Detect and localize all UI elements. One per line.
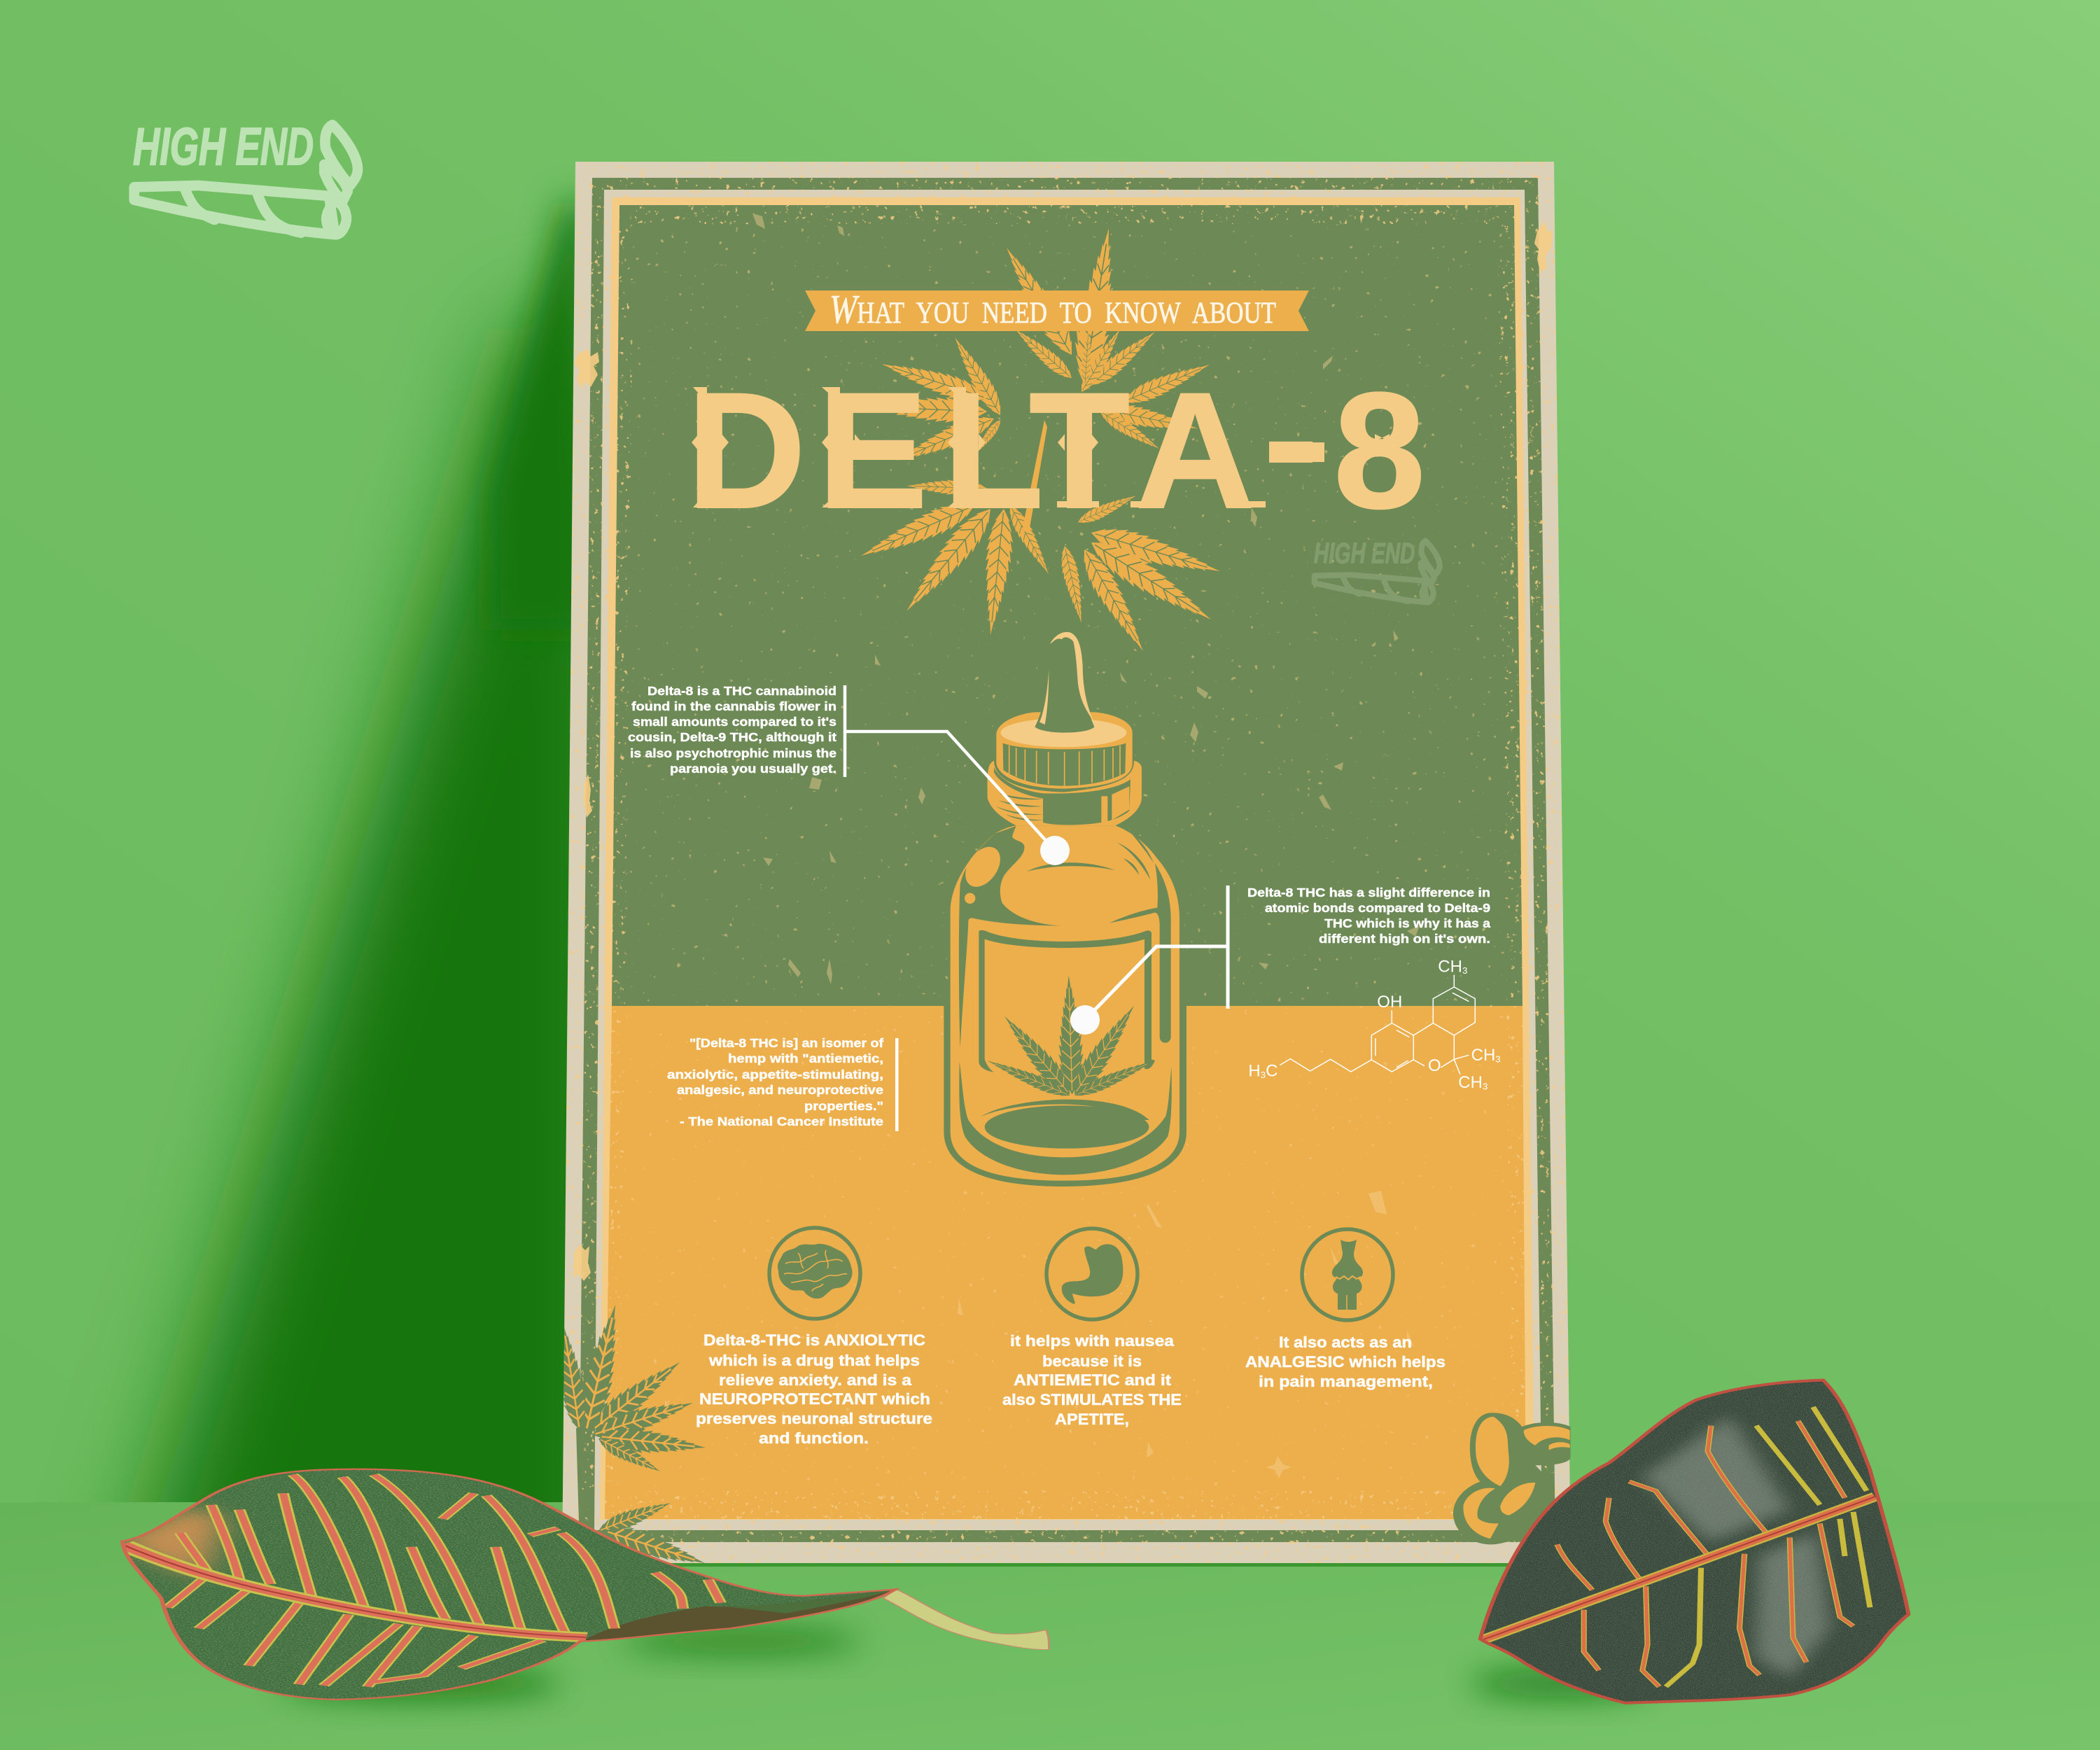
logo top left: HIGH END [133,117,314,176]
right shoulder streaks [1129,831,1154,863]
callout: atomic bonds: Delta-8 THC has a slight difference in [1247,886,1490,899]
watermark logo [1314,536,1440,602]
poster outer frame [562,162,1571,1563]
THC molecule diagram [1248,957,1501,1092]
dropper bulb [1035,636,1094,733]
leaf midrib [1482,1497,1875,1640]
THC molecule diagram: O [1428,1056,1441,1075]
left leaf shadow [280,1629,861,1699]
heading ribbon [805,286,1309,332]
orange lower panel [605,1006,1526,1519]
callout: national cancer institute quote [667,1036,883,1128]
callout: what delta-8 is [628,684,836,776]
column text: antiemetic: it helps with nausea [1010,1332,1175,1350]
green upper panel [612,205,1522,1006]
dropper bottle [944,632,1186,1186]
watermark logo: HIGH END [1314,536,1415,569]
leaf on label [984,975,1158,1102]
leaf midrib [122,1545,587,1637]
column text: anxiolytic: which is a drug that helps [708,1352,920,1369]
callout: atomic bonds: atomic bonds compared to Delta-9 [1265,901,1490,915]
right side shading and highlight bar [1110,863,1171,1043]
THC molecule diagram: C [1266,1061,1278,1080]
callout: national cancer institute quote: hemp with "antiemetic, [728,1051,883,1065]
callout: atomic bonds: different high on it's own. [1319,932,1490,946]
poster cast shadow [91,185,575,1502]
callout: what delta-8 is: is also psychotrophic minus the [630,746,836,760]
collar green band [994,768,1130,825]
callout: national cancer institute quote: "[Delta-8 THC is] an isomer of [690,1036,883,1050]
icon: stomach [1046,1228,1138,1320]
THC molecule diagram: OH [1377,993,1402,1011]
THC molecule diagram: 3 [1495,1054,1501,1065]
column text: antiemetic: APETITE, [1055,1410,1129,1428]
THC molecule diagram: CH [1458,1073,1483,1092]
left shoulder shading [959,826,1062,1048]
upper cap [996,712,1133,789]
paint chips on orange panel [665,1191,1414,1478]
callout line: top [845,685,1070,865]
collar highlight bars [1101,786,1129,822]
poster contact shadow [567,1560,1568,1567]
column text: antiemetic: ANTIEMETIC and it [1014,1371,1172,1389]
leaf veins [167,1475,721,1687]
column text: analgesic: ANALGESIC which helps [1245,1353,1446,1371]
THC molecule diagram: H [1248,1061,1261,1080]
callout: atomic bonds [1247,886,1490,946]
leaf vein glow [1557,1407,1870,1687]
liquid meniscus [1027,862,1115,872]
callout: what delta-8 is: small amounts compared to it's [633,715,836,729]
callout: atomic bonds: THC which is why it has a [1324,916,1490,930]
column text: antiemetic [1002,1332,1182,1428]
quote bar [895,1038,899,1131]
column text: anxiolytic: and function. [759,1429,869,1447]
bottle base crescent [959,1062,1172,1175]
frame inner beige strip [594,190,1542,1530]
frame green band [579,178,1555,1542]
decorative corner leaf bottom left [564,1305,706,1563]
right leaf shadow [1470,1670,1652,1698]
column text: anxiolytic: NEUROPROTECTANT which [699,1390,930,1408]
frame pale orange strip [600,197,1534,1520]
bottle label [979,930,1155,1072]
leaf grey sheen [1642,1416,1830,1677]
speckle texture [562,162,1571,1563]
bottle outer outline [944,980,1186,1186]
cap top [1000,718,1126,747]
callout: national cancer institute quote: anxiolytic, appetite-stimulating, [667,1068,883,1082]
neck threads [996,793,1043,820]
shoulder highlights [958,841,1007,893]
distressed frame edges [562,162,1571,1563]
column text: anxiolytic: Delta-8-THC is ANXIOLYTIC [704,1331,925,1349]
callout: what delta-8 is: found in the cannabis flower in [631,699,836,713]
ribbon heading text: WHAT YOU NEED TO KNOW ABOUT [830,286,1276,332]
lower cap collar [988,761,1142,825]
column text: analgesic [1245,1334,1446,1390]
leaf tip colouring [118,1505,224,1579]
leaf rim [122,1469,896,1700]
leaf vein glow [167,1475,721,1687]
leaf veins [1557,1421,1854,1687]
column text: antiemetic: because it is [1042,1352,1142,1370]
bottle base ellipse [985,1105,1149,1149]
THC molecule diagram: 3 [1483,1082,1488,1092]
cap ribs [1003,743,1126,786]
background floor [0,1502,2100,1750]
callout: what delta-8 is: cousin, Delta-9 THC, although it [628,730,836,744]
cannabis plant behind title [855,225,1224,657]
column text: analgesic: in pain management, [1259,1373,1433,1390]
croton leaf left [105,1458,1049,1705]
column text: antiemetic: also STIMULATES THE [1002,1391,1182,1408]
bottle glass body [951,825,1180,1181]
paint chips [752,214,1420,984]
logo top left [133,117,358,234]
callout: national cancer institute quote: properties." [804,1099,883,1113]
icon: knee joint [1302,1229,1393,1320]
poster [551,162,1571,1575]
croton leaf right [1469,1377,1920,1708]
callout: what delta-8 is: paranoia you usually get. [670,762,836,776]
decorative seeds bottom right [1453,1413,1571,1544]
dropper highlights [1050,632,1094,722]
column text: anxiolytic: preserves neuronal structure [696,1410,932,1427]
THC molecule diagram: CH [1438,957,1462,976]
column text: analgesic: It also acts as an [1279,1334,1412,1351]
frame wear patches [574,221,1553,1281]
callout: national cancer institute quote: analgesic, and neuroprotective [677,1083,883,1097]
logo joint icon [134,125,358,234]
THC molecule diagram: 3 [1462,965,1467,976]
leaf underside fold [581,1589,896,1642]
callout: national cancer institute quote: - The National Cancer Institute [680,1114,883,1128]
callout line: label [1070,886,1228,1035]
column text: anxiolytic: relieve anxiety. and is a [719,1371,912,1389]
THC molecule diagram: CH [1471,1046,1495,1065]
column text: anxiolytic [696,1331,932,1447]
THC molecule diagram: 3 [1261,1070,1266,1080]
title serif spurs [692,387,1392,507]
leaf rim [1480,1380,1908,1703]
main title: DELTA-8 [687,346,1425,543]
leaf stem [883,1589,1049,1650]
icon: brain [769,1228,860,1319]
callout: what delta-8 is: Delta-8 is a THC cannabinoid [648,684,836,698]
